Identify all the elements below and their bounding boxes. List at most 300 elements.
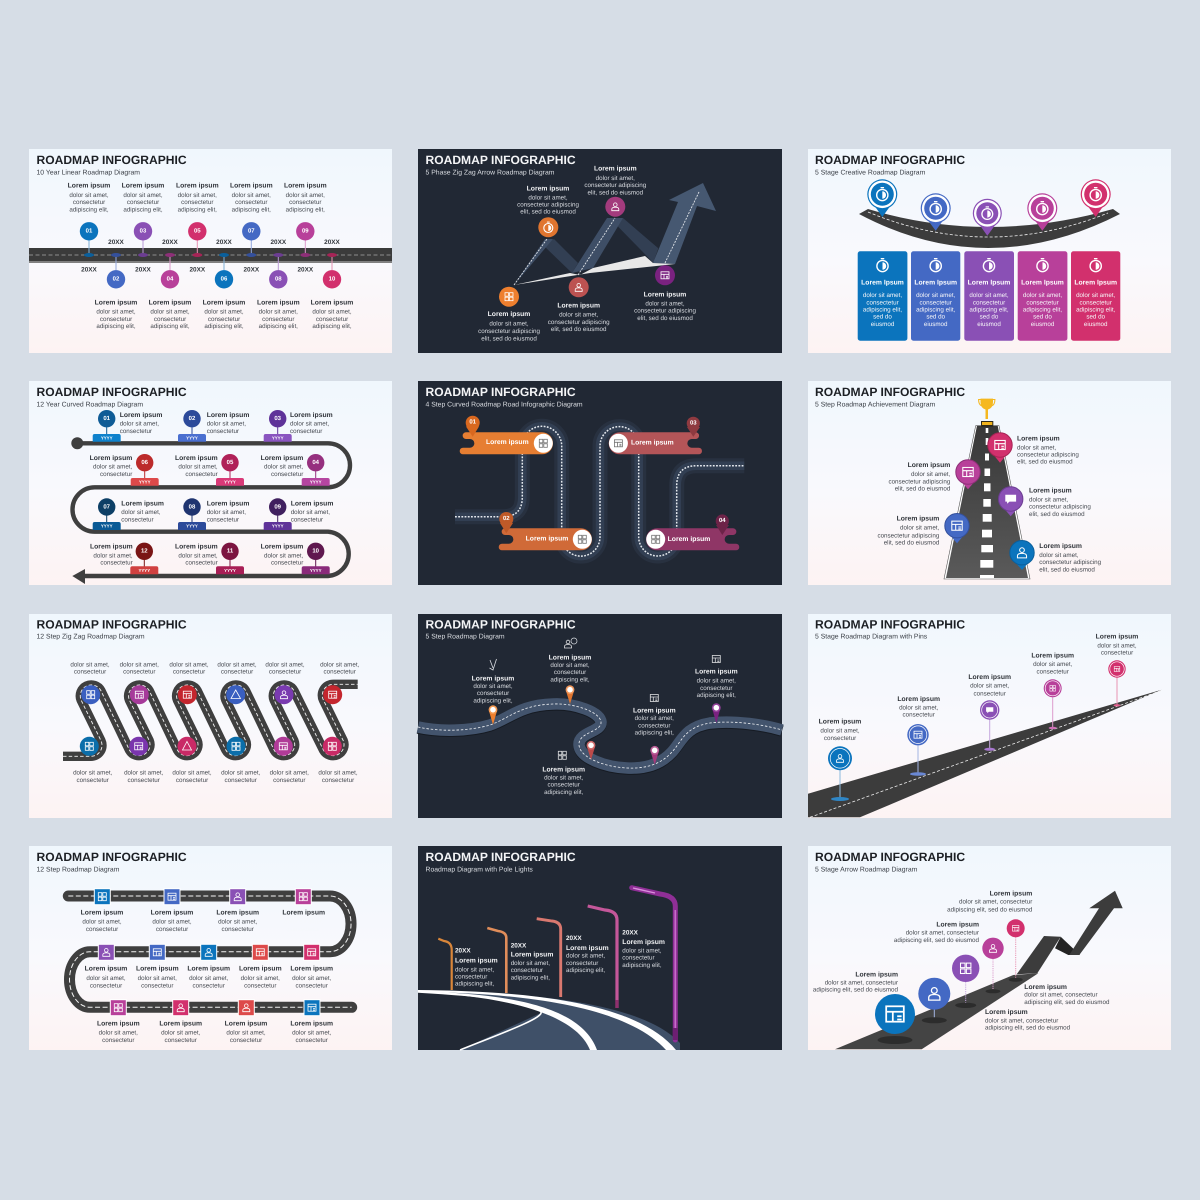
step 2: dolor sit amet, bbox=[911, 470, 951, 478]
phase 2: Lorem ipsum bbox=[527, 185, 569, 192]
step 01: 20XX bbox=[81, 266, 98, 274]
year 11: Lorem ipsum bbox=[175, 543, 218, 550]
stage 5 bbox=[1007, 919, 1110, 1006]
year 07: Lorem ipsum bbox=[121, 500, 164, 507]
step 3: Lorem ipsum bbox=[1029, 487, 1072, 494]
pin 5 and text: Lorem ipsum bbox=[695, 668, 738, 675]
phase 2: dolor sit amet, bbox=[528, 194, 568, 201]
subheading: 5 Stage Arrow Roadmap Diagram bbox=[815, 866, 918, 874]
stage 5: Lorem ipsum bbox=[1024, 984, 1067, 990]
pin 3: consectetur bbox=[974, 690, 1006, 697]
year 05: 05 bbox=[227, 459, 234, 466]
middle row text: dolor sit amet, bbox=[292, 974, 332, 982]
step 07: adipiscing elit, bbox=[232, 206, 271, 213]
pole 3 and text: Lorem ipsum bbox=[566, 944, 609, 952]
top labels: dolor sit amet, bbox=[70, 661, 110, 668]
year 09: YYYY bbox=[272, 524, 284, 528]
bottom row text: Lorem ipsum bbox=[159, 1020, 202, 1027]
card 1: consectetur bbox=[866, 299, 899, 306]
top row text: Lorem ipsum bbox=[216, 909, 259, 916]
year 02: YYYY bbox=[186, 436, 198, 440]
card 3: eiusmod bbox=[977, 320, 1001, 328]
stage 2: adipiscing elit, sed do eiusmod bbox=[894, 936, 980, 944]
phase 3: dolor sit amet, bbox=[559, 311, 599, 318]
year 10: YYYY bbox=[310, 568, 322, 573]
pin 1: dolor sit amet, bbox=[820, 727, 860, 734]
subheading: 5 Stage Roadmap Diagram with Pins bbox=[815, 634, 928, 640]
phase 5: dolor sit amet, bbox=[645, 300, 685, 307]
year 04: YYYY bbox=[310, 480, 322, 484]
step 5: dolor sit amet, bbox=[1039, 552, 1079, 558]
phase 5 bbox=[634, 265, 696, 322]
step 02: adipiscing elit, bbox=[96, 322, 136, 330]
year 08: dolor sit amet, bbox=[207, 508, 246, 516]
subheading: 12 Step Roadmap Diagram bbox=[36, 866, 120, 874]
panel: 5 stage arrow roadmap bbox=[808, 846, 1171, 1050]
card 4: eiusmod bbox=[1031, 320, 1055, 328]
pin 2: dolor sit amet, bbox=[899, 704, 939, 711]
panel: 5 step achievement bbox=[808, 381, 1171, 585]
year 08 bbox=[178, 498, 249, 530]
top labels: dolor sit amet, bbox=[217, 661, 257, 668]
step 04 bbox=[149, 239, 191, 330]
year 02: 02 bbox=[189, 415, 196, 422]
step 09: consectetur bbox=[289, 198, 321, 206]
top row markers bbox=[94, 889, 311, 905]
heading: ROADMAP INFOGRAPHIC bbox=[426, 385, 576, 399]
stage 3 bbox=[947, 890, 1033, 1008]
stage 4 bbox=[982, 938, 1071, 1031]
heading: ROADMAP INFOGRAPHIC bbox=[426, 618, 576, 632]
pin 1: consectetur bbox=[824, 734, 856, 742]
step 01: dolor sit amet, bbox=[69, 192, 109, 198]
step 04: 04 bbox=[167, 276, 174, 283]
pin 2: Lorem ipsum bbox=[897, 696, 940, 702]
year 06: dolor sit amet, bbox=[93, 463, 133, 470]
step 4: dolor sit amet, bbox=[900, 524, 940, 531]
step 10: 20XX bbox=[324, 239, 341, 246]
phase 4 bbox=[584, 165, 647, 217]
stage 3: dolor sit amet, consectetur bbox=[959, 898, 1032, 905]
top row text: dolor sit amet, bbox=[284, 918, 324, 925]
top labels: dolor sit amet, bbox=[120, 661, 159, 668]
curved road bbox=[859, 209, 1120, 248]
year 03: 03 bbox=[274, 415, 282, 422]
heading: ROADMAP INFOGRAPHIC bbox=[36, 850, 187, 864]
subheading: 10 Year Linear Roadmap Diagram bbox=[36, 170, 140, 176]
step 01: adipiscing elit, bbox=[69, 206, 109, 213]
step 06: Lorem ipsum bbox=[203, 299, 245, 306]
top row text: dolor sit amet, bbox=[152, 918, 192, 925]
phase 1: consectetur adipiscing bbox=[478, 328, 540, 334]
card 3: Lorem Ipsum bbox=[968, 279, 1010, 286]
bottom labels: dolor sit amet, bbox=[221, 769, 261, 776]
top labels: dolor sit amet, bbox=[265, 661, 305, 668]
banner 03: 03 bbox=[690, 419, 697, 426]
year 10: dolor sit amet, bbox=[264, 552, 304, 559]
pin 5: consectetur bbox=[1101, 649, 1133, 656]
step 09: dolor sit amet, bbox=[286, 192, 325, 198]
heading: ROADMAP INFOGRAPHIC bbox=[36, 385, 187, 399]
step 05 bbox=[176, 182, 219, 274]
heading: ROADMAP INFOGRAPHIC bbox=[815, 618, 965, 632]
stage 1: adipiscing elit, sed do eiusmod bbox=[813, 986, 899, 993]
subheading: 5 Stage Creative Roadmap Diagram bbox=[815, 170, 926, 176]
step 10: Lorem ipsum bbox=[311, 299, 353, 306]
year 03: consectetur bbox=[290, 428, 322, 434]
year 02: consectetur bbox=[207, 428, 239, 434]
stage 2: Lorem ipsum bbox=[936, 921, 979, 928]
step 07: consectetur bbox=[235, 198, 267, 206]
banner 04: Lorem ipsum bbox=[668, 536, 710, 543]
year 11: YYYY bbox=[224, 568, 236, 573]
pin 3 and text: dolor sit amet, bbox=[544, 774, 584, 781]
pin 4: consectetur bbox=[1037, 668, 1069, 675]
pole 2 and text bbox=[487, 928, 553, 993]
step 06: adipiscing elit, bbox=[204, 322, 244, 330]
top row text: Lorem ipsum bbox=[151, 909, 193, 916]
card 1: dolor sit amet, bbox=[863, 292, 902, 298]
top labels: consectetur bbox=[173, 668, 205, 675]
year 01: 01 bbox=[103, 415, 111, 422]
top row text: dolor sit amet, bbox=[82, 918, 122, 925]
heading: ROADMAP INFOGRAPHIC bbox=[36, 153, 187, 167]
year 04: 04 bbox=[312, 459, 320, 466]
pin 5 and text bbox=[695, 656, 738, 723]
year 05: consectetur bbox=[185, 470, 218, 478]
bottom row text: consectetur bbox=[165, 1036, 197, 1044]
road arrow bbox=[835, 891, 1123, 1049]
step 2 bbox=[888, 460, 980, 492]
bottom labels: dolor sit amet, bbox=[318, 769, 358, 776]
top labels: consectetur bbox=[221, 668, 253, 675]
step 10: dolor sit amet, bbox=[312, 308, 352, 315]
subheading: 12 Step Zig Zag Roadmap Diagram bbox=[36, 634, 145, 640]
card 3: consectetur bbox=[973, 299, 1005, 306]
pin 5 and text: adipiscing elit, bbox=[697, 692, 736, 698]
stage 4: Lorem ipsum bbox=[985, 1008, 1028, 1016]
bottom labels: dolor sit amet, bbox=[172, 769, 212, 776]
card 3: sed do bbox=[980, 313, 999, 320]
step 05: 20XX bbox=[189, 266, 206, 274]
year 07 bbox=[93, 498, 164, 530]
step 09: 09 bbox=[302, 228, 309, 235]
panel: 5 step winding road bbox=[418, 614, 782, 818]
bottom row text: dolor sit amet, bbox=[226, 1029, 266, 1036]
phase 4: consectetur adipiscing bbox=[584, 182, 647, 188]
top labels: consectetur bbox=[123, 668, 155, 675]
panel: 5 stage roadmap with pins bbox=[808, 614, 1171, 818]
step 07 bbox=[230, 182, 273, 274]
phase 3: consectetur adipiscing bbox=[548, 318, 610, 326]
panel: 4 step curved road bbox=[418, 381, 782, 585]
pole 2 and text: 20XX bbox=[511, 942, 527, 949]
pin 3: Lorem ipsum bbox=[968, 674, 1011, 680]
year 08: YYYY bbox=[186, 524, 198, 528]
top row text: dolor sit amet, bbox=[218, 918, 258, 925]
card 3: adipiscing elit, bbox=[969, 306, 1009, 313]
pole 3 and text bbox=[537, 919, 609, 997]
card 1: adipiscing elit, bbox=[863, 306, 902, 313]
subheading: 12 Year Curved Roadmap Diagram bbox=[36, 402, 143, 408]
year 10 bbox=[261, 543, 330, 574]
pole 4 and text: 20XX bbox=[622, 929, 639, 936]
stage 1 bbox=[813, 971, 915, 1044]
card 2: consectetur bbox=[920, 299, 952, 306]
pole 1 and text: dolor sit amet, bbox=[455, 966, 495, 973]
bottom row text: dolor sit amet, bbox=[161, 1029, 201, 1036]
step 06: dolor sit amet, bbox=[204, 308, 244, 315]
step 07: 20XX bbox=[243, 266, 260, 274]
marker icons bbox=[98, 893, 316, 1012]
year 03: YYYY bbox=[272, 436, 284, 440]
pin 5: dolor sit amet, bbox=[1097, 642, 1137, 649]
year 11: consectetur bbox=[185, 559, 218, 566]
pin 4 and text: consectetur bbox=[638, 722, 670, 729]
card 2 bbox=[911, 251, 960, 341]
card 2: sed do bbox=[926, 313, 946, 320]
stage 5: adipiscing elit, sed do eiusmod bbox=[1024, 998, 1110, 1006]
bottom row text: Lorem ipsum bbox=[225, 1020, 267, 1027]
pole 2 and text: adipiscing elit, bbox=[511, 974, 550, 981]
step 04: adipiscing elit, bbox=[150, 322, 190, 330]
pin 4 and text bbox=[633, 694, 676, 765]
year 01: YYYY bbox=[101, 436, 113, 440]
pin 4 bbox=[1031, 652, 1074, 729]
heading: ROADMAP INFOGRAPHIC bbox=[426, 153, 576, 167]
step 4 bbox=[877, 514, 969, 546]
card 4: Lorem Ipsum bbox=[1021, 279, 1064, 286]
winding road bbox=[455, 426, 744, 556]
year 05 bbox=[175, 454, 244, 486]
bottom icons bbox=[80, 737, 342, 756]
phase 2: elit, sed do eiusmod bbox=[520, 208, 576, 215]
bottom labels: consectetur bbox=[128, 776, 160, 784]
card 5: dolor sit amet, bbox=[1076, 292, 1116, 298]
phase 4: elit, sed do eiusmod bbox=[588, 189, 644, 196]
step 5: Lorem ipsum bbox=[1039, 542, 1082, 550]
bottom row text: consectetur bbox=[296, 1036, 328, 1044]
subheading: 5 Step Roadmap Achievement Diagram bbox=[815, 402, 936, 408]
winding road bbox=[418, 704, 782, 769]
year 12: consectetur bbox=[100, 559, 133, 566]
phase 5: elit, sed do eiusmod bbox=[637, 314, 693, 322]
top row text: consectetur bbox=[156, 926, 188, 932]
middle row text: consectetur bbox=[141, 982, 173, 989]
pin 3 and text: consectetur bbox=[548, 781, 580, 788]
pole 3 and text: consectetur bbox=[566, 960, 598, 966]
step 08: consectetur bbox=[262, 316, 294, 322]
step 10: adipiscing elit, bbox=[312, 322, 352, 330]
year 01: Lorem ipsum bbox=[120, 412, 162, 418]
year 07: YYYY bbox=[101, 524, 113, 528]
pin 2 bbox=[921, 193, 951, 231]
step 09: adipiscing elit, bbox=[286, 206, 325, 213]
step 07: dolor sit amet, bbox=[232, 192, 271, 198]
bottom labels: consectetur bbox=[322, 776, 354, 784]
card 5: sed do bbox=[1086, 313, 1106, 320]
phase 3: elit, sed do eiusmod bbox=[551, 326, 607, 332]
step 10 bbox=[311, 239, 353, 330]
step 05: Lorem ipsum bbox=[176, 182, 219, 189]
road bbox=[29, 248, 392, 263]
middle row text: dolor sit amet, bbox=[138, 974, 177, 982]
bottom labels: dolor sit amet, bbox=[124, 769, 164, 776]
step 3: consectetur adipiscing bbox=[1029, 503, 1091, 510]
card 4: consectetur bbox=[1026, 299, 1059, 306]
year 09: consectetur bbox=[291, 516, 323, 523]
step 01 bbox=[68, 182, 110, 274]
pin 5 bbox=[1081, 179, 1111, 217]
pole 2 and text: dolor sit amet, bbox=[511, 960, 550, 966]
middle row text: dolor sit amet, bbox=[189, 974, 229, 982]
top row text: Lorem ipsum bbox=[81, 909, 123, 916]
banner 02: Lorem ipsum bbox=[526, 536, 568, 542]
pin 4 and text: dolor sit amet, bbox=[635, 714, 674, 722]
pin 2 and text: consectetur bbox=[554, 668, 586, 676]
year 02: dolor sit amet, bbox=[207, 420, 246, 427]
step 03: 03 bbox=[140, 228, 147, 235]
pin 1 and text: dolor sit amet, bbox=[473, 682, 513, 690]
step 08 bbox=[257, 239, 300, 330]
middle row text: consectetur bbox=[90, 982, 122, 989]
pin 2 and text: adipiscing elit, bbox=[550, 676, 590, 683]
pin 1 and text: consectetur bbox=[477, 690, 509, 696]
step 09: Lorem ipsum bbox=[284, 182, 327, 189]
year 12: dolor sit amet, bbox=[93, 552, 133, 559]
phase 2: consectetur adipiscing bbox=[517, 201, 579, 208]
card 4: dolor sit amet, bbox=[1023, 292, 1062, 298]
step 5: consectetur adipiscing bbox=[1039, 558, 1102, 566]
top row text: consectetur bbox=[288, 926, 320, 932]
pole 4 and text bbox=[588, 906, 665, 1008]
step 1 bbox=[988, 433, 1079, 465]
top row text: consectetur bbox=[222, 926, 254, 932]
middle row markers bbox=[98, 944, 320, 960]
year 08: 08 bbox=[189, 503, 196, 510]
year 02 bbox=[178, 410, 249, 442]
stage 1: Lorem ipsum bbox=[855, 971, 898, 978]
top row text: consectetur bbox=[86, 926, 118, 932]
pin 3 bbox=[973, 199, 1002, 236]
phase 1: Lorem ipsum bbox=[488, 310, 530, 318]
step 3 bbox=[998, 487, 1091, 518]
pin 5: Lorem ipsum bbox=[1096, 633, 1138, 640]
step 10: consectetur bbox=[316, 316, 348, 322]
pin 1 and text: Lorem ipsum bbox=[472, 675, 514, 682]
bottom row text: dolor sit amet, bbox=[99, 1029, 138, 1036]
trophy bbox=[979, 399, 995, 427]
phase 1: elit, sed do eiusmod bbox=[481, 335, 537, 342]
step 08: 08 bbox=[275, 276, 282, 283]
pole 2 and text: Lorem ipsum bbox=[511, 951, 553, 958]
phase 3 bbox=[548, 277, 610, 332]
step 05: adipiscing elit, bbox=[178, 206, 217, 213]
middle row text: Lorem ipsum bbox=[239, 965, 282, 972]
step 4: Lorem ipsum bbox=[897, 515, 939, 522]
bottom row text: Lorem ipsum bbox=[290, 1020, 333, 1027]
middle row text: Lorem ipsum bbox=[187, 965, 230, 972]
step 3: elit, sed do eiusmod bbox=[1029, 510, 1085, 518]
year 05: Lorem ipsum bbox=[175, 454, 218, 462]
middle row text: dolor sit amet, bbox=[241, 974, 280, 982]
step 01: consectetur bbox=[73, 198, 105, 206]
pin 5 bbox=[1096, 633, 1138, 706]
step 4: consectetur adipiscing bbox=[877, 532, 940, 539]
step 3: dolor sit amet, bbox=[1029, 496, 1069, 503]
pin 2 bbox=[897, 696, 940, 776]
step 10: 10 bbox=[329, 276, 336, 283]
step 06: consectetur bbox=[208, 316, 240, 322]
heading: ROADMAP INFOGRAPHIC bbox=[815, 850, 965, 864]
pin 3 and text: adipiscing elit, bbox=[544, 788, 584, 796]
year 12 bbox=[90, 543, 158, 574]
subheading: 5 Step Roadmap Diagram bbox=[426, 634, 505, 640]
card 2: Lorem Ipsum bbox=[914, 279, 957, 286]
step 1: dolor sit amet, bbox=[1017, 444, 1057, 451]
card 1 bbox=[858, 251, 907, 341]
pin 1: Lorem ipsum bbox=[819, 718, 861, 725]
card 5: eiusmod bbox=[1084, 320, 1108, 328]
year 09 bbox=[264, 498, 333, 530]
panel: 12 year curved roadmap bbox=[29, 381, 392, 585]
step 07: Lorem ipsum bbox=[230, 182, 273, 189]
pin 3 and text bbox=[542, 741, 595, 796]
pin 5 and text: consectetur bbox=[700, 684, 732, 692]
pin 1 bbox=[867, 179, 897, 217]
step 03: dolor sit amet, bbox=[123, 192, 163, 198]
subheading: 5 Phase Zig Zag Arrow Roadmap Diagram bbox=[426, 170, 555, 176]
card 1: eiusmod bbox=[871, 320, 895, 328]
top labels: consectetur bbox=[324, 668, 356, 675]
pole 3 and text: dolor sit amet, bbox=[566, 952, 606, 959]
step 04: dolor sit amet, bbox=[150, 308, 190, 315]
panel: 12 step roadmap bbox=[29, 846, 392, 1050]
heading: ROADMAP INFOGRAPHIC bbox=[426, 850, 576, 864]
top labels: dolor sit amet, bbox=[169, 661, 209, 668]
heading: ROADMAP INFOGRAPHIC bbox=[815, 153, 965, 167]
pin 2: consectetur bbox=[903, 711, 935, 718]
year 03: Lorem ipsum bbox=[290, 412, 333, 418]
step 05: dolor sit amet, bbox=[178, 192, 217, 198]
year 10: Lorem ipsum bbox=[261, 543, 303, 550]
step 02: consectetur bbox=[100, 316, 132, 322]
phase 5: Lorem ipsum bbox=[644, 291, 686, 298]
step 2: Lorem ipsum bbox=[908, 462, 950, 468]
middle row text: dolor sit amet, bbox=[86, 974, 126, 982]
card 2: eiusmod bbox=[924, 320, 948, 328]
year 05: YYYY bbox=[224, 480, 236, 484]
pole 1 and text bbox=[438, 939, 498, 990]
step 03: Lorem ipsum bbox=[122, 182, 164, 189]
year 07: dolor sit amet, bbox=[121, 508, 161, 516]
top labels: consectetur bbox=[269, 668, 301, 675]
top row text: Lorem ipsum bbox=[282, 909, 325, 916]
step 02 bbox=[95, 239, 137, 330]
phase 4: dolor sit amet, bbox=[596, 174, 635, 182]
card 5: adipiscing elit, bbox=[1076, 306, 1116, 313]
year 06 bbox=[90, 454, 159, 486]
year 01: consectetur bbox=[120, 428, 152, 434]
panel: 5 stage creative roadmap bbox=[808, 149, 1171, 353]
year 08: consectetur bbox=[207, 516, 239, 523]
year 08: Lorem ipsum bbox=[207, 500, 249, 507]
bottom labels: consectetur bbox=[273, 776, 305, 784]
year 06: YYYY bbox=[139, 480, 151, 484]
step 08: adipiscing elit, bbox=[259, 322, 298, 330]
pin 3 bbox=[968, 674, 1011, 751]
year 12: YYYY bbox=[138, 568, 150, 573]
